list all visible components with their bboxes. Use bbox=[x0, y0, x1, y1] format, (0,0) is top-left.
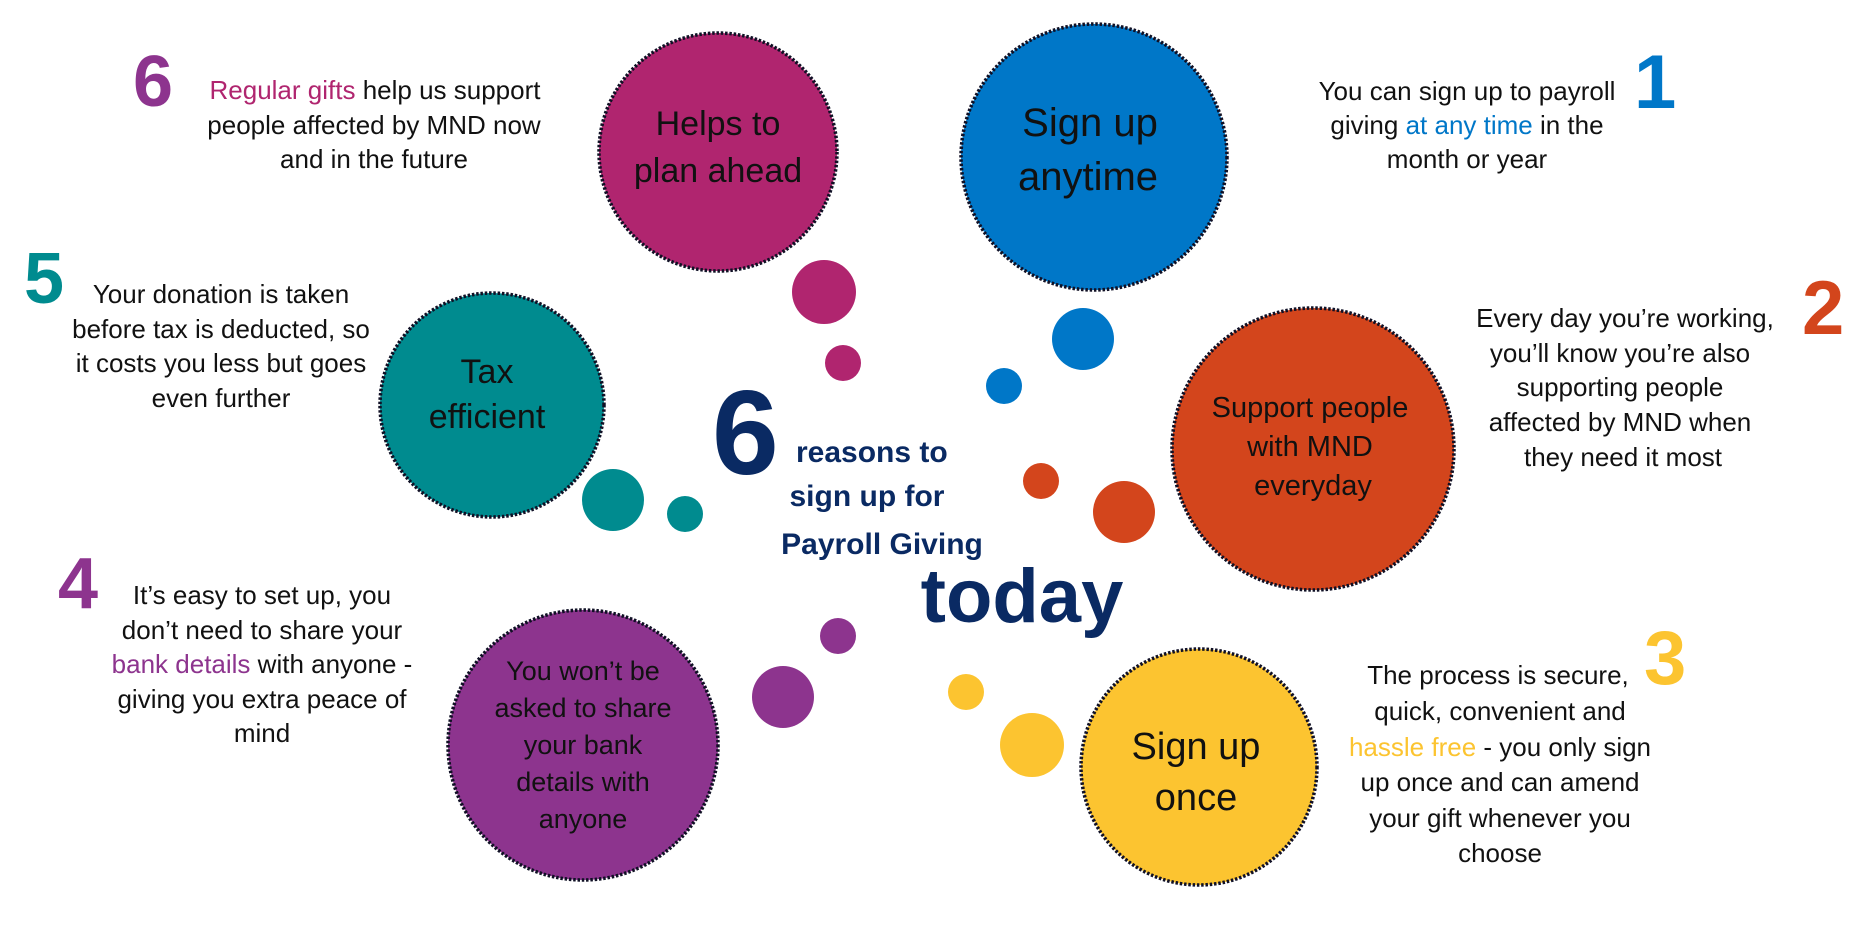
title bbox=[712, 366, 1123, 639]
reason 4 text bbox=[58, 544, 412, 748]
reason 3 text: up once and can amend bbox=[1360, 767, 1640, 797]
reason 2 text: supporting people bbox=[1517, 372, 1723, 402]
reason 1 text: month or year bbox=[1387, 144, 1548, 174]
circle: tax efficient bbox=[380, 293, 604, 517]
reason 2 text: you’ll know you’re also bbox=[1490, 338, 1750, 368]
reason 3 text bbox=[1349, 616, 1686, 868]
reason 4 text: don’t need to share your bbox=[122, 615, 403, 645]
title: sign up for bbox=[790, 480, 945, 513]
title: reasons to bbox=[796, 436, 948, 469]
reason 4 text: It’s easy to set up, you bbox=[133, 580, 391, 610]
circle: tax efficient: efficient bbox=[429, 398, 546, 436]
title: today bbox=[921, 554, 1123, 639]
circle: support people with MND everyday: with MND bbox=[1246, 431, 1373, 463]
reason 6 text: and in the future bbox=[280, 144, 468, 174]
circle: bank details bbox=[448, 610, 718, 880]
circle: sign up anytime bbox=[961, 24, 1227, 290]
circle: sign up anytime: Sign up bbox=[1022, 101, 1158, 145]
circle: bank details: details with bbox=[516, 767, 650, 797]
reason 3 text: 3 bbox=[1644, 616, 1686, 701]
connector dots bbox=[582, 260, 1155, 777]
circle: helps to plan ahead: plan ahead bbox=[634, 152, 802, 190]
title: 6 bbox=[712, 366, 779, 500]
circle: support people with MND everyday: everyday bbox=[1254, 470, 1372, 502]
reason 5 text: it costs you less but goes bbox=[76, 348, 366, 378]
circle: sign up anytime: anytime bbox=[1018, 155, 1158, 199]
reason 1 text: 1 bbox=[1634, 40, 1676, 125]
reason 2 text: Every day you’re working, bbox=[1476, 303, 1774, 333]
reason 5 text: before tax is deducted, so bbox=[72, 314, 370, 344]
reason 5 text: even further bbox=[152, 383, 291, 413]
reason 1 text: giving at any time in the bbox=[1330, 110, 1604, 140]
circle: bank details: anyone bbox=[539, 804, 627, 834]
reason 2 text bbox=[1476, 266, 1844, 472]
circle: helps to plan ahead: Helps to bbox=[656, 105, 780, 143]
reason 3 text: your gift whenever you bbox=[1369, 803, 1631, 833]
circle: bank details: your bank bbox=[524, 730, 643, 760]
reason 2 text: they need it most bbox=[1524, 442, 1723, 472]
reason 2 text: 2 bbox=[1802, 266, 1844, 351]
circle: tax efficient: Tax bbox=[461, 353, 513, 391]
circle: sign up once: Sign up bbox=[1132, 726, 1260, 768]
reason 3 text: hassle free - you only sign bbox=[1349, 732, 1651, 762]
circle: helps to plan ahead bbox=[599, 33, 837, 271]
title: Payroll Giving bbox=[781, 528, 983, 561]
circle: support people with MND everyday: Support people bbox=[1212, 392, 1408, 424]
reason 5 text: 5 bbox=[24, 239, 64, 319]
reason 6 text: 6 bbox=[133, 42, 173, 122]
circle: bank details: asked to share bbox=[494, 693, 672, 723]
circle: sign up once: once bbox=[1155, 777, 1237, 819]
reason 3 text: quick, convenient and bbox=[1374, 696, 1626, 726]
reason 5 text: Your donation is taken bbox=[93, 279, 349, 309]
reason 5 text bbox=[24, 239, 370, 413]
circle: bank details: You won’t be bbox=[506, 656, 660, 686]
circle: support people with MND everyday bbox=[1172, 308, 1454, 590]
reason 6 text: people affected by MND now bbox=[207, 110, 541, 140]
reason 6 text bbox=[133, 42, 541, 174]
reason 4 text: giving you extra peace of bbox=[117, 684, 407, 714]
circle: sign up once bbox=[1081, 649, 1317, 885]
reason 3 text: The process is secure, bbox=[1367, 660, 1629, 690]
reason 4 text: mind bbox=[234, 718, 290, 748]
reason 6 text: Regular gifts help us support bbox=[210, 75, 541, 105]
reason 4 text: bank details with anyone - bbox=[112, 649, 412, 679]
reason 1 text bbox=[1319, 40, 1676, 174]
reason 3 text: choose bbox=[1458, 838, 1542, 868]
reason 1 text: You can sign up to payroll bbox=[1319, 76, 1615, 106]
reason 4 text: 4 bbox=[58, 544, 98, 624]
reason 2 text: affected by MND when bbox=[1489, 407, 1751, 437]
